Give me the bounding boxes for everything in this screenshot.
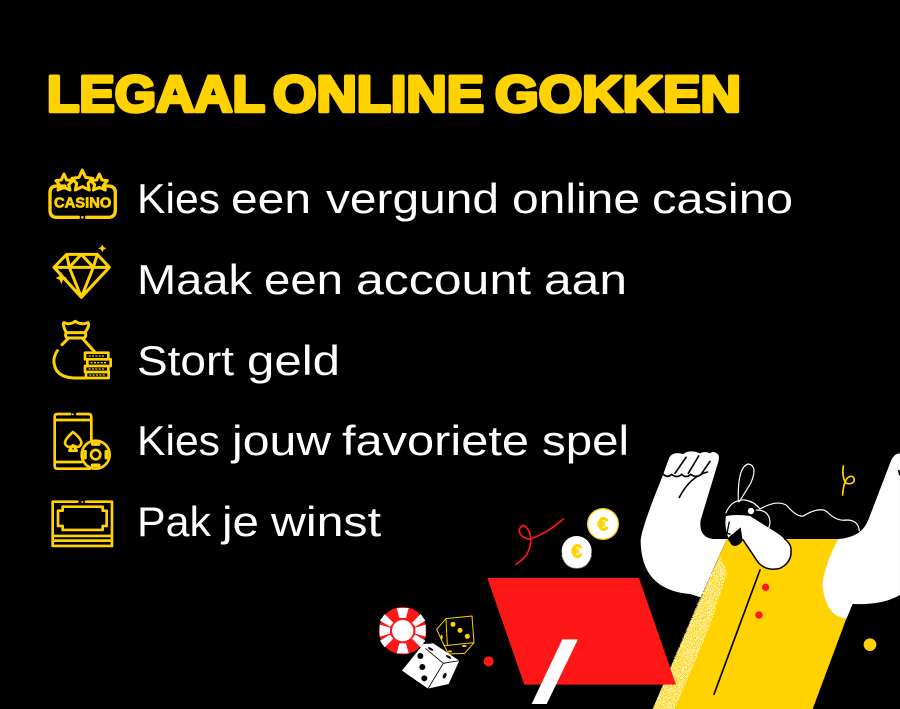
list item 2 text bbox=[137, 256, 627, 303]
coin two: € bbox=[571, 541, 582, 562]
neck outline bbox=[743, 538, 791, 569]
list item 5 text: winst bbox=[270, 498, 381, 545]
white die bbox=[402, 643, 459, 689]
list item 1 text: Kies bbox=[137, 175, 220, 222]
list item 4 text: favoriete bbox=[342, 417, 529, 464]
list item 4 text bbox=[137, 417, 629, 464]
facial mark bbox=[727, 522, 731, 534]
list item 5 text: je bbox=[220, 498, 259, 545]
list item 2 text: account bbox=[356, 256, 531, 303]
icon: money bag with coins bbox=[54, 321, 111, 378]
necklace line bbox=[714, 570, 760, 694]
title: LEGAAL bbox=[47, 65, 265, 122]
list item 5 text: Pak bbox=[137, 498, 212, 545]
dress speckle bbox=[653, 557, 727, 709]
face and neck bbox=[725, 515, 791, 569]
yellow dot bbox=[864, 638, 876, 651]
right arm bbox=[822, 453, 900, 618]
illustration: laptop, coins, chip and dice bbox=[379, 509, 676, 704]
list item 4 text: spel bbox=[542, 417, 629, 464]
icon: phone with chip bbox=[55, 413, 110, 469]
list item 2 text: een bbox=[264, 256, 343, 303]
icon: banknote stack bbox=[53, 501, 112, 546]
list item 2 text: aan bbox=[544, 256, 627, 303]
coin one: € bbox=[598, 514, 609, 535]
red buttons bbox=[762, 584, 769, 591]
title bbox=[47, 65, 741, 122]
list item 4 text: Kies bbox=[137, 417, 220, 464]
casino chip bbox=[379, 607, 426, 654]
outlined die bbox=[437, 616, 474, 654]
icon: diamond bbox=[54, 245, 109, 297]
red squiggle bbox=[516, 519, 563, 564]
coin one bbox=[588, 509, 618, 539]
hair arc bbox=[756, 510, 770, 529]
chin shadow bbox=[727, 527, 743, 546]
list item 4 text: jouw bbox=[230, 417, 332, 464]
list item 3 text: geld bbox=[247, 337, 340, 384]
list item 3 text: Stort bbox=[137, 337, 234, 384]
finger lines bbox=[663, 456, 710, 497]
red screen bbox=[487, 578, 676, 685]
title: ONLINE bbox=[273, 65, 484, 122]
icon: casino sign bbox=[50, 170, 115, 219]
list item 1 text: casino bbox=[652, 175, 793, 222]
white stripe bbox=[532, 639, 578, 704]
list item 3 text bbox=[137, 337, 340, 384]
list item 5 text bbox=[137, 498, 381, 545]
list item 1 text: vergund bbox=[326, 175, 499, 222]
list item 1 text: een bbox=[231, 175, 311, 222]
hair outline bbox=[726, 464, 859, 531]
list item 1 text: online bbox=[512, 175, 640, 222]
dress bbox=[653, 539, 853, 709]
illustration: woman with raised arms bbox=[641, 451, 900, 709]
coin two bbox=[562, 536, 592, 568]
yellow squiggle bbox=[843, 466, 854, 495]
list item 1 text bbox=[137, 175, 793, 222]
list item 2 text: Maak bbox=[137, 256, 253, 303]
ear bbox=[747, 507, 755, 515]
icon: casino sign: CASINO bbox=[54, 196, 111, 212]
red dot bbox=[484, 656, 494, 666]
left arm bbox=[641, 451, 727, 597]
title: GOKKEN bbox=[495, 65, 741, 122]
